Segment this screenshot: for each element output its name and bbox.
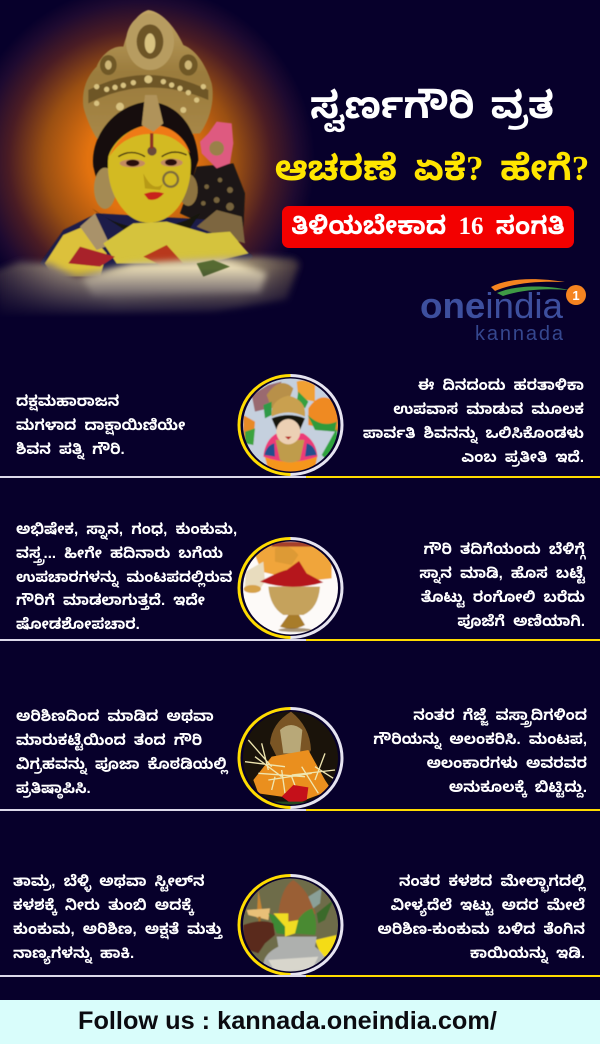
row 4 left text: ತಾಮ್ರ, ಬೆಳ್ಳಿ ಅಥವಾ ಸ್ಟೀಲ್‌ನ — [13, 873, 205, 890]
row 3 right text: ಗೌರಿಯನ್ನು ಅಲಂಕರಿಸಿ. ಮಂಟಪ, — [373, 731, 587, 748]
row 4 left text — [13, 873, 223, 964]
row 3 left text — [16, 708, 228, 799]
flower garland — [103, 222, 248, 263]
row 3 left text: ವಿಗ್ರಹವನ್ನು ಪೂಜಾ ಕೊಠಡಿಯಲ್ಲಿ — [16, 756, 227, 773]
logo: oneindia kannada — [420, 279, 586, 345]
row 4 right text: ಅರಿಶಿಣ-ಕುಂಕುಮ ಬಳಿದ ತೆಂಗಿನ — [377, 921, 585, 938]
row 1 right text: ಪಾರ್ವತಿ ಶಿವನನ್ನು ಒಲಿಸಿಕೊಂಡಳು — [363, 425, 584, 442]
row 1 left text — [16, 393, 185, 460]
earring — [94, 168, 116, 209]
row 4 left text: ಕಳಶಕ್ಕೆ ನೀರು ತುಂಬಿ ಅದಕ್ಕೆ — [13, 897, 194, 914]
footer text: Follow us : kannada.oneindia.com/ — [78, 1007, 497, 1035]
row 1 right text — [363, 377, 584, 467]
bowl — [268, 587, 320, 615]
crown — [83, 10, 213, 138]
logo: oneindia kannada: kannada — [475, 323, 564, 345]
row 1 left text: ದಕ್ಷಮಹಾರಾಜನ — [16, 393, 119, 410]
title: ಸ್ವರ್ಣಗೌರಿ ವ್ರತ — [310, 84, 554, 126]
subtitle: ಆಚರಣೆ ಏಕೆ? ಹೇಗೆ? — [275, 149, 589, 188]
logo: oneindia kannada: 1 — [572, 288, 580, 303]
row 3 right text: ನಂತರ ಗೆಜ್ಜೆ ವಸ್ತ್ರಾದಿಗಳಿಂದ — [413, 707, 587, 724]
row 2 right text: ಸ್ನಾನ ಮಾಡಿ, ಹೊಸ ಬಟ್ಟೆ — [419, 565, 585, 582]
doll body — [264, 455, 318, 473]
row 4 right text — [377, 873, 586, 964]
row 4 right text: ಕಾಯಿಯನ್ನು ಇಡಿ. — [470, 945, 585, 962]
pink flower — [200, 122, 233, 168]
hair — [93, 102, 198, 187]
row 3 right text: ಅನುಕೂಲಕ್ಕೆ ಬಿಟ್ಟಿದ್ದು. — [449, 779, 587, 796]
divider 1 — [0, 476, 600, 478]
divider 4 — [0, 975, 600, 977]
row 1 right text: ಉಪವಾಸ ಮಾಡುವ ಮೂಲಕ — [393, 401, 584, 418]
crown centre drop — [142, 95, 163, 132]
row 2 left text: ಅಭಿಷೇಕ, ಸ್ನಾನ, ಗಂಧ, ಕುಂಕುಮ, — [16, 521, 237, 538]
footer bar — [0, 1000, 600, 1044]
row 3 right text: ಅಲಂಕಾರಗಳು ಅವರವರ — [427, 755, 587, 772]
row 2 left text: ವಸ್ತ್ರ... ಹೀಗೇ ಹದಿನಾರು ಬಗೆಯ — [16, 545, 223, 562]
divider 3 — [0, 809, 600, 811]
thumbnail 4: kalash with coconut — [238, 874, 344, 975]
row 2 right text: ಪೂಜೆಗೆ ಅಣಿಯಾಗಿ. — [457, 613, 585, 630]
shoulders — [40, 213, 253, 277]
row 1 right text: ಎಂಬ ಪ್ರತೀತಿ ಇದೆ. — [461, 449, 584, 466]
thumbnail 2: kumkum bowl — [238, 537, 344, 639]
row 1 left text: ಮಗಳಾದ ದಾಕ್ಷಾಯಿಣಿಯೇ — [16, 417, 185, 434]
row 4 left text: ನಾಣ್ಯಗಳನ್ನು ಹಾಕಿ. — [13, 945, 134, 962]
neck beads — [92, 208, 200, 233]
badge: 16 facts: ತಿಳಿಯಬೇಕಾದ 16 ಸಂಗತಿ — [291, 213, 565, 240]
row 3 left text: ಅರಿಶಿಣದಿಂದ ಮಾಡಿದ ಅಥವಾ — [16, 708, 214, 725]
thumbnail 3: turmeric gauri — [238, 707, 344, 809]
row 4 left text: ಕುಂಕುಮ, ಅರಿಶಿಣ, ಅಕ್ಷತೆ ಮತ್ತು — [13, 921, 222, 938]
row 3 left text: ಪ್ರತಿಷ್ಠಾಪಿಸಿ. — [16, 780, 91, 797]
row 1 left text: ಶಿವನ ಪತ್ನಿ ಗೌರಿ. — [16, 441, 125, 458]
thumbnail 1: gauri dolls — [238, 374, 344, 476]
white flower bed — [0, 257, 300, 320]
row 2 right text: ಗೌರಿ ತದಿಗೆಯಂದು ಬೆಳಿಗ್ಗೆ — [424, 541, 585, 558]
row 1 right text: ಈ ದಿನದಂದು ಹರತಾಳಿಕಾ — [418, 377, 584, 394]
face — [108, 125, 191, 223]
divider 2 — [0, 639, 600, 641]
row 2 right text: ತೊಟ್ಟು ರಂಗೋಲಿ ಬರೆದು — [421, 589, 585, 606]
badge: 16 facts — [282, 206, 574, 248]
row 2 left text: ಗೌರಿಗೆ ಮಾಡಲಾಗುತ್ತದೆ. ಇದೇ — [16, 592, 205, 609]
hero: goddess statue with glow — [0, 0, 309, 315]
logo: oneindia kannada: oneindia — [420, 285, 564, 326]
kalash — [263, 937, 326, 973]
row 3 left text: ಮಾರುಕಟ್ಟೆಯಿಂದ ತಂದ ಗೌರಿ — [16, 732, 202, 749]
row 3 right text — [373, 707, 587, 798]
row 4 right text: ನಂತರ ಕಳಶದ ಮೇಲ್ಭಾಗದಲ್ಲಿ — [399, 873, 585, 890]
row 4 right text: ವೀಳ್ಯದೆಲೆ ಇಟ್ಟು ಅದರ ಮೇಲೆ — [391, 897, 585, 914]
row 2 left text — [16, 521, 237, 633]
kumkum — [260, 561, 323, 587]
row 2 right text — [419, 541, 586, 630]
row 2 left text: ಷೋಡಶೋಪಚಾರ. — [16, 616, 140, 633]
back hair and braid — [180, 163, 245, 230]
row 2 left text: ಉಪಚಾರಗಳನ್ನು ಮಂಟಪದಲ್ಲಿರುವ — [16, 570, 232, 586]
